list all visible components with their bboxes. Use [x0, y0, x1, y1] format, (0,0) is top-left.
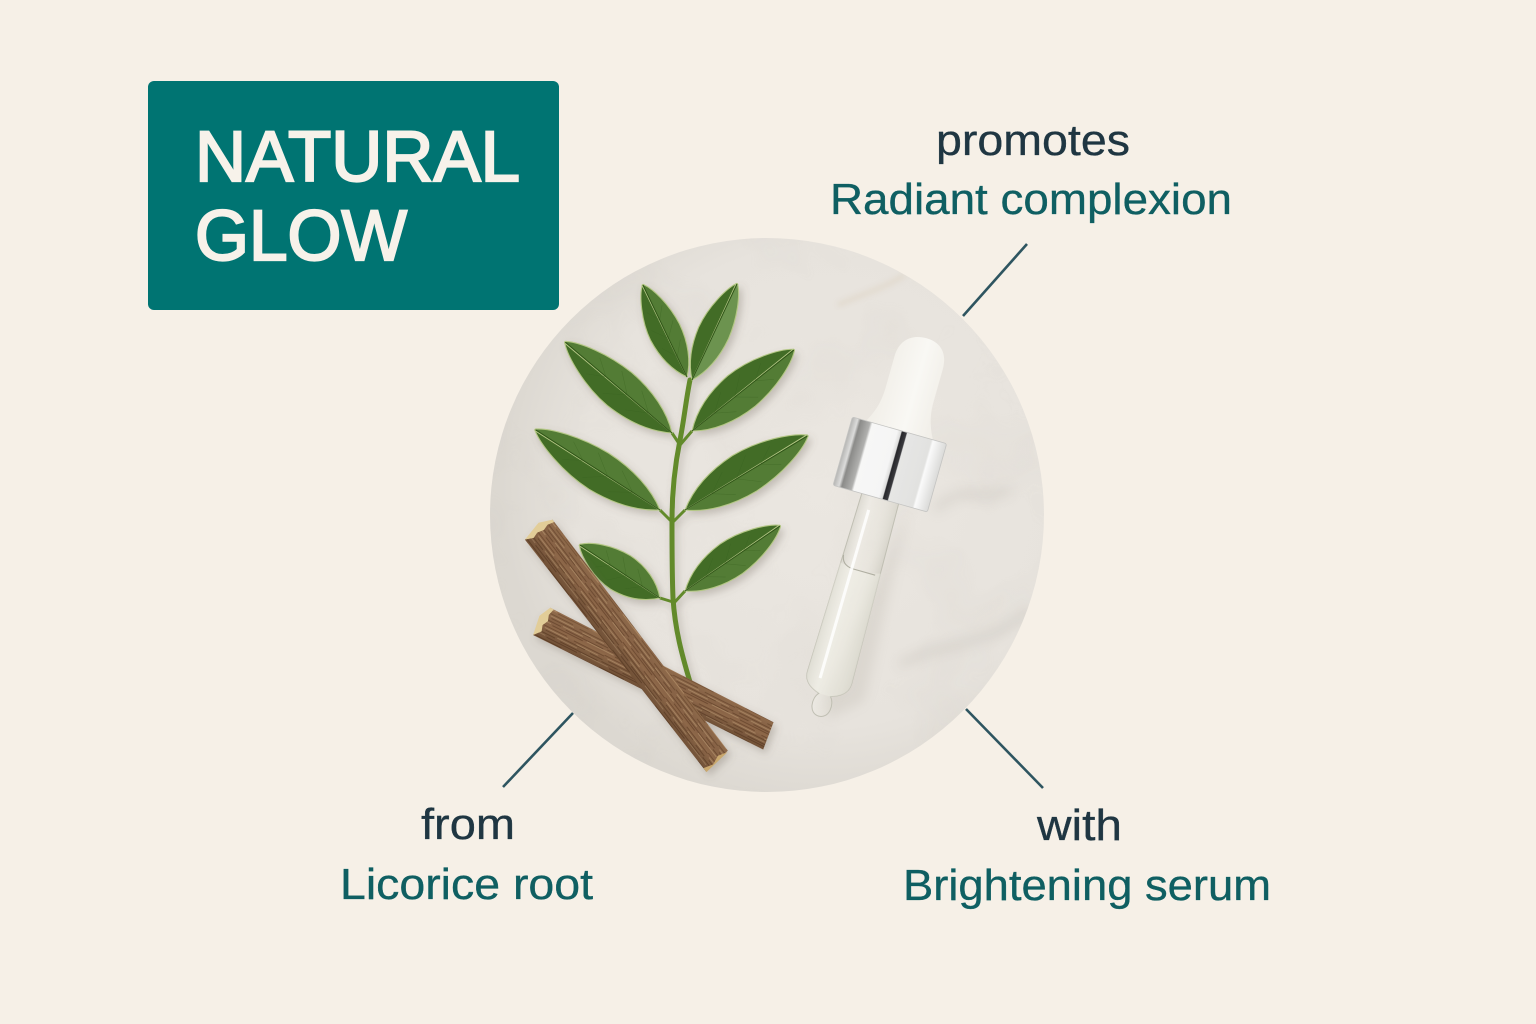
label: with brightening serum: Brightening serum: [903, 861, 1271, 910]
label: from licorice root: Licorice root: [340, 860, 593, 909]
dropper shadow: [819, 502, 918, 727]
label: from licorice root: [340, 800, 593, 909]
callout line: radiant complexion: [963, 244, 1027, 316]
marble circle: [490, 238, 1044, 792]
glass tube: [797, 487, 904, 722]
stick upper: [522, 515, 732, 773]
stem: [672, 380, 690, 682]
label: from licorice root: from: [421, 800, 515, 849]
title badge: [148, 81, 559, 310]
label: promotes radiant complexion: promotes: [936, 116, 1130, 165]
label: promotes radiant complexion: Radiant complexion: [830, 175, 1232, 224]
icon: leafy sprig: [524, 277, 819, 682]
icon: licorice root sticks: [522, 515, 777, 773]
title text: GLOW: [195, 197, 407, 276]
callout line: licorice root: [503, 713, 573, 787]
label: promotes radiant complexion: [830, 116, 1232, 224]
metal collar: [833, 417, 947, 512]
title text: NATURAL: [195, 118, 520, 197]
label: with brightening serum: [903, 801, 1271, 910]
serum liquid: [803, 562, 883, 701]
rubber bulb: [859, 327, 964, 450]
label: with brightening serum: with: [1036, 801, 1122, 850]
stick lower: [530, 605, 777, 750]
icon: serum dropper: [772, 325, 973, 729]
title text: [195, 118, 520, 276]
callout line: brightening serum: [966, 709, 1043, 788]
